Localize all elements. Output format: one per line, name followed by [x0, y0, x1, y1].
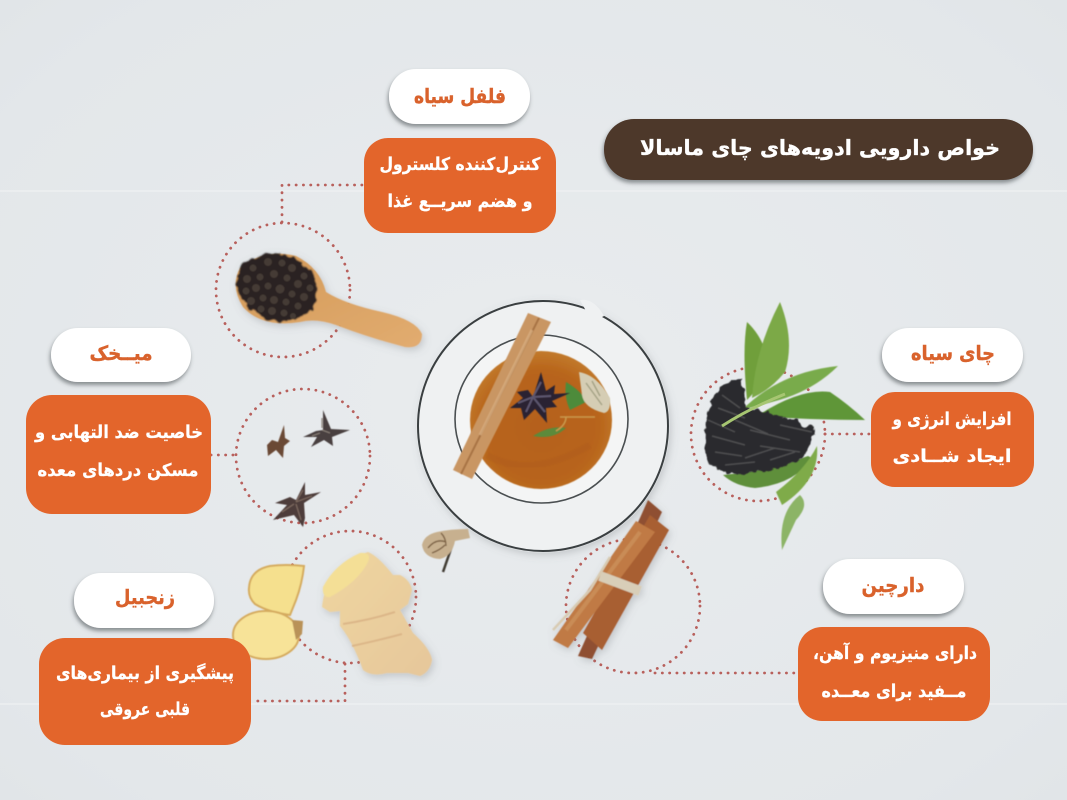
peppercorns — [228, 243, 326, 331]
description box: خاصیت ضد التهابی و — [34, 423, 203, 443]
description box — [364, 138, 556, 233]
icon: pepper spoon — [228, 243, 422, 347]
clove small — [267, 425, 290, 458]
icon: star anise cloves — [267, 410, 350, 527]
green leaves — [723, 302, 865, 550]
description box — [39, 638, 251, 745]
title banner: خواص دارویی ادویه‌های چای ماسالا — [640, 136, 1000, 160]
label pill: زنجبیل — [115, 585, 175, 609]
icon: star anise — [510, 372, 570, 423]
description box — [871, 392, 1034, 487]
ginger root — [322, 552, 432, 676]
label pill — [74, 573, 214, 628]
card: black pepper — [364, 69, 556, 233]
icon: cinnamon bundle — [553, 500, 669, 659]
icon: black tea — [704, 302, 865, 550]
description box: افزایش انرژی و — [892, 410, 1012, 430]
label pill — [389, 69, 530, 124]
description box — [798, 627, 990, 721]
icon: ginger — [233, 552, 432, 676]
icon: small dried flower — [422, 529, 470, 572]
connector lines — [211, 185, 871, 701]
ginger slices — [233, 565, 304, 659]
card: cinnamon — [798, 559, 990, 721]
description box: و هضم سریــع غذا — [388, 192, 532, 212]
description box: مسکن دردهای معده — [38, 461, 198, 481]
clove large right — [303, 410, 350, 447]
card: clove — [26, 328, 211, 514]
label pill: دارچین — [862, 573, 924, 598]
label pill — [882, 328, 1023, 382]
label pill: میــخک — [90, 341, 152, 365]
label pill: چای سیاه — [911, 341, 995, 366]
description box: پیشگیری از بیماری‌های — [56, 663, 234, 684]
green leaf stems over tea — [722, 394, 785, 426]
description box — [26, 395, 211, 514]
dotted circles — [216, 223, 825, 673]
card: ginger — [39, 573, 251, 745]
label pill — [51, 328, 191, 382]
description box: مــفید برای معــده — [822, 682, 966, 702]
icon: tea cup on saucer — [417, 300, 669, 552]
title banner — [604, 119, 1033, 180]
card: black tea — [871, 328, 1034, 487]
icon: floating leaf and flower — [533, 372, 610, 437]
label pill: فلفل سیاه — [414, 84, 506, 108]
description box: ایجاد شــادی — [892, 447, 1012, 467]
description box: قلبی عروقی — [100, 700, 190, 720]
description box: کنترل‌کننده کلسترول — [380, 155, 541, 175]
label pill — [823, 559, 964, 614]
clove large bottom — [273, 482, 321, 527]
description box: دارای منیزیوم و آهن، — [813, 641, 977, 664]
icon: cinnamon stick — [453, 313, 551, 479]
dry tea leaves — [704, 380, 815, 474]
